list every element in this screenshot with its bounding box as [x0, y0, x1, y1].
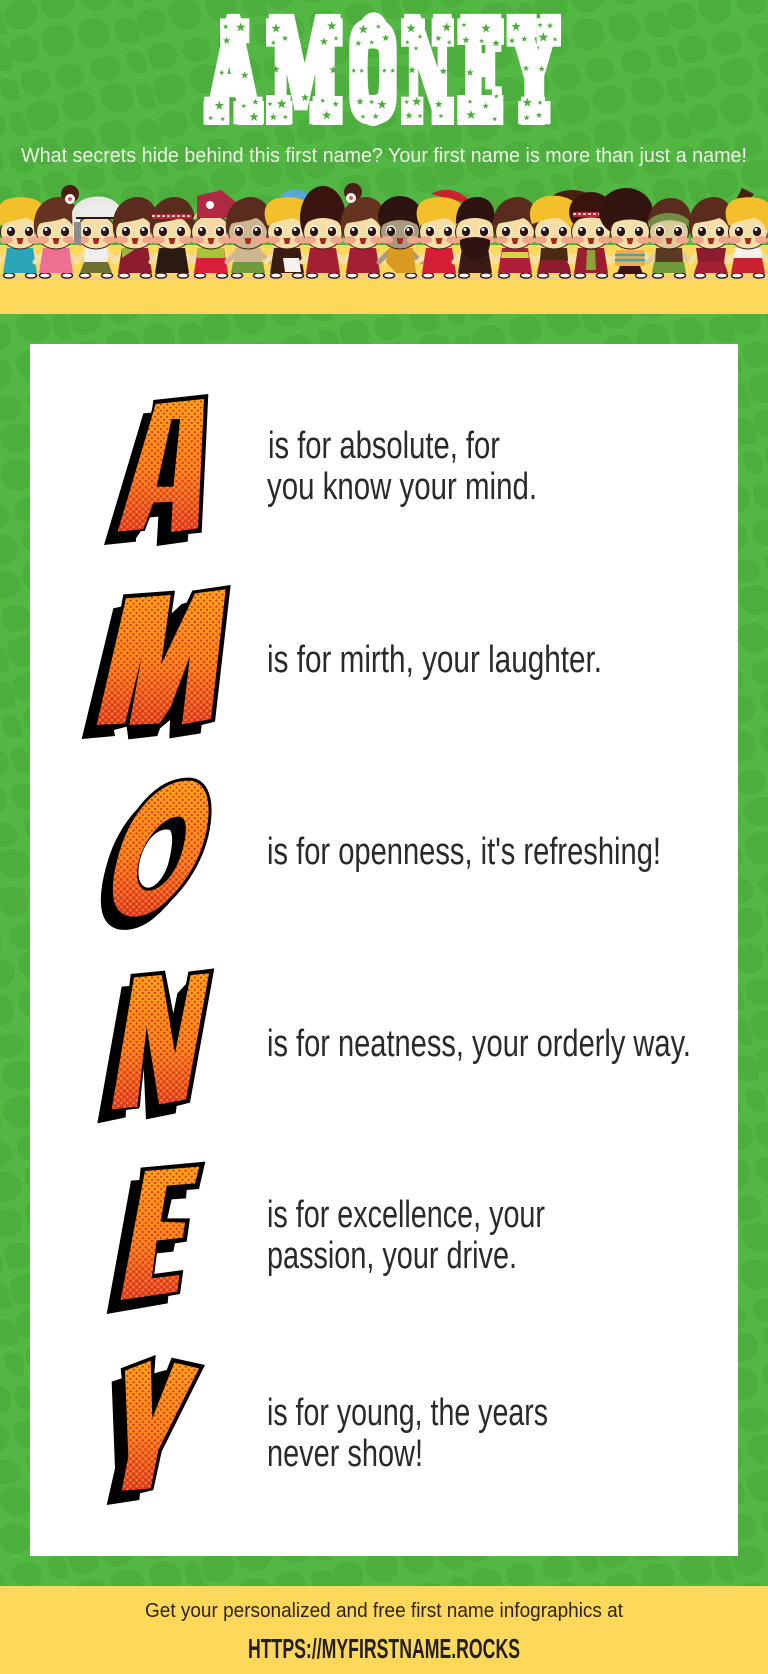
letter O row	[104, 781, 661, 927]
title decoration: slab blocks behind the name	[204, 18, 561, 125]
letter E row	[107, 1162, 545, 1314]
letter A row	[104, 394, 537, 546]
text: Y meaning	[267, 1392, 548, 1475]
yellow band behind characters	[0, 245, 768, 314]
panel: white content card	[30, 344, 738, 1556]
text: Y meaning: is for young, the years	[267, 1392, 548, 1434]
ground line	[0, 277, 768, 280]
icon: comic letter M	[82, 585, 231, 739]
text: A meaning	[267, 425, 537, 508]
text: A meaning: you know your mind.	[267, 466, 537, 508]
illustration: row of chibi children	[0, 183, 768, 278]
icon: comic letter A	[104, 394, 208, 546]
text: E meaning: is for excellence, your	[267, 1194, 545, 1236]
icon: comic letter E	[107, 1162, 205, 1314]
tagline: What secrets hide behind this first name? Your first name is more than just a name!	[21, 144, 747, 167]
letter M row	[82, 585, 602, 739]
text: O meaning: is for openness, it's refreshing!	[267, 831, 661, 873]
icon: comic letter O	[104, 781, 209, 927]
icon: comic letter Y	[107, 1355, 205, 1505]
letter N row	[97, 968, 691, 1123]
icon: comic letter N	[97, 968, 214, 1123]
text: Y meaning: never show!	[267, 1433, 423, 1475]
text: M meaning: is for mirth, your laughter.	[267, 639, 602, 681]
text: A meaning: is for absolute, for	[268, 425, 500, 467]
text: E meaning: passion, your drive.	[267, 1235, 517, 1277]
footer url: HTTPS://MYFIRSTNAME.ROCKS	[248, 1633, 520, 1664]
letter Y row	[107, 1355, 548, 1505]
title decoration: green stars	[208, 21, 558, 121]
title: AMONEY	[204, 0, 562, 148]
footer band	[0, 1586, 768, 1674]
footer text: Get your personalized and free first name infographics at	[145, 1600, 623, 1622]
text: E meaning	[267, 1194, 545, 1277]
